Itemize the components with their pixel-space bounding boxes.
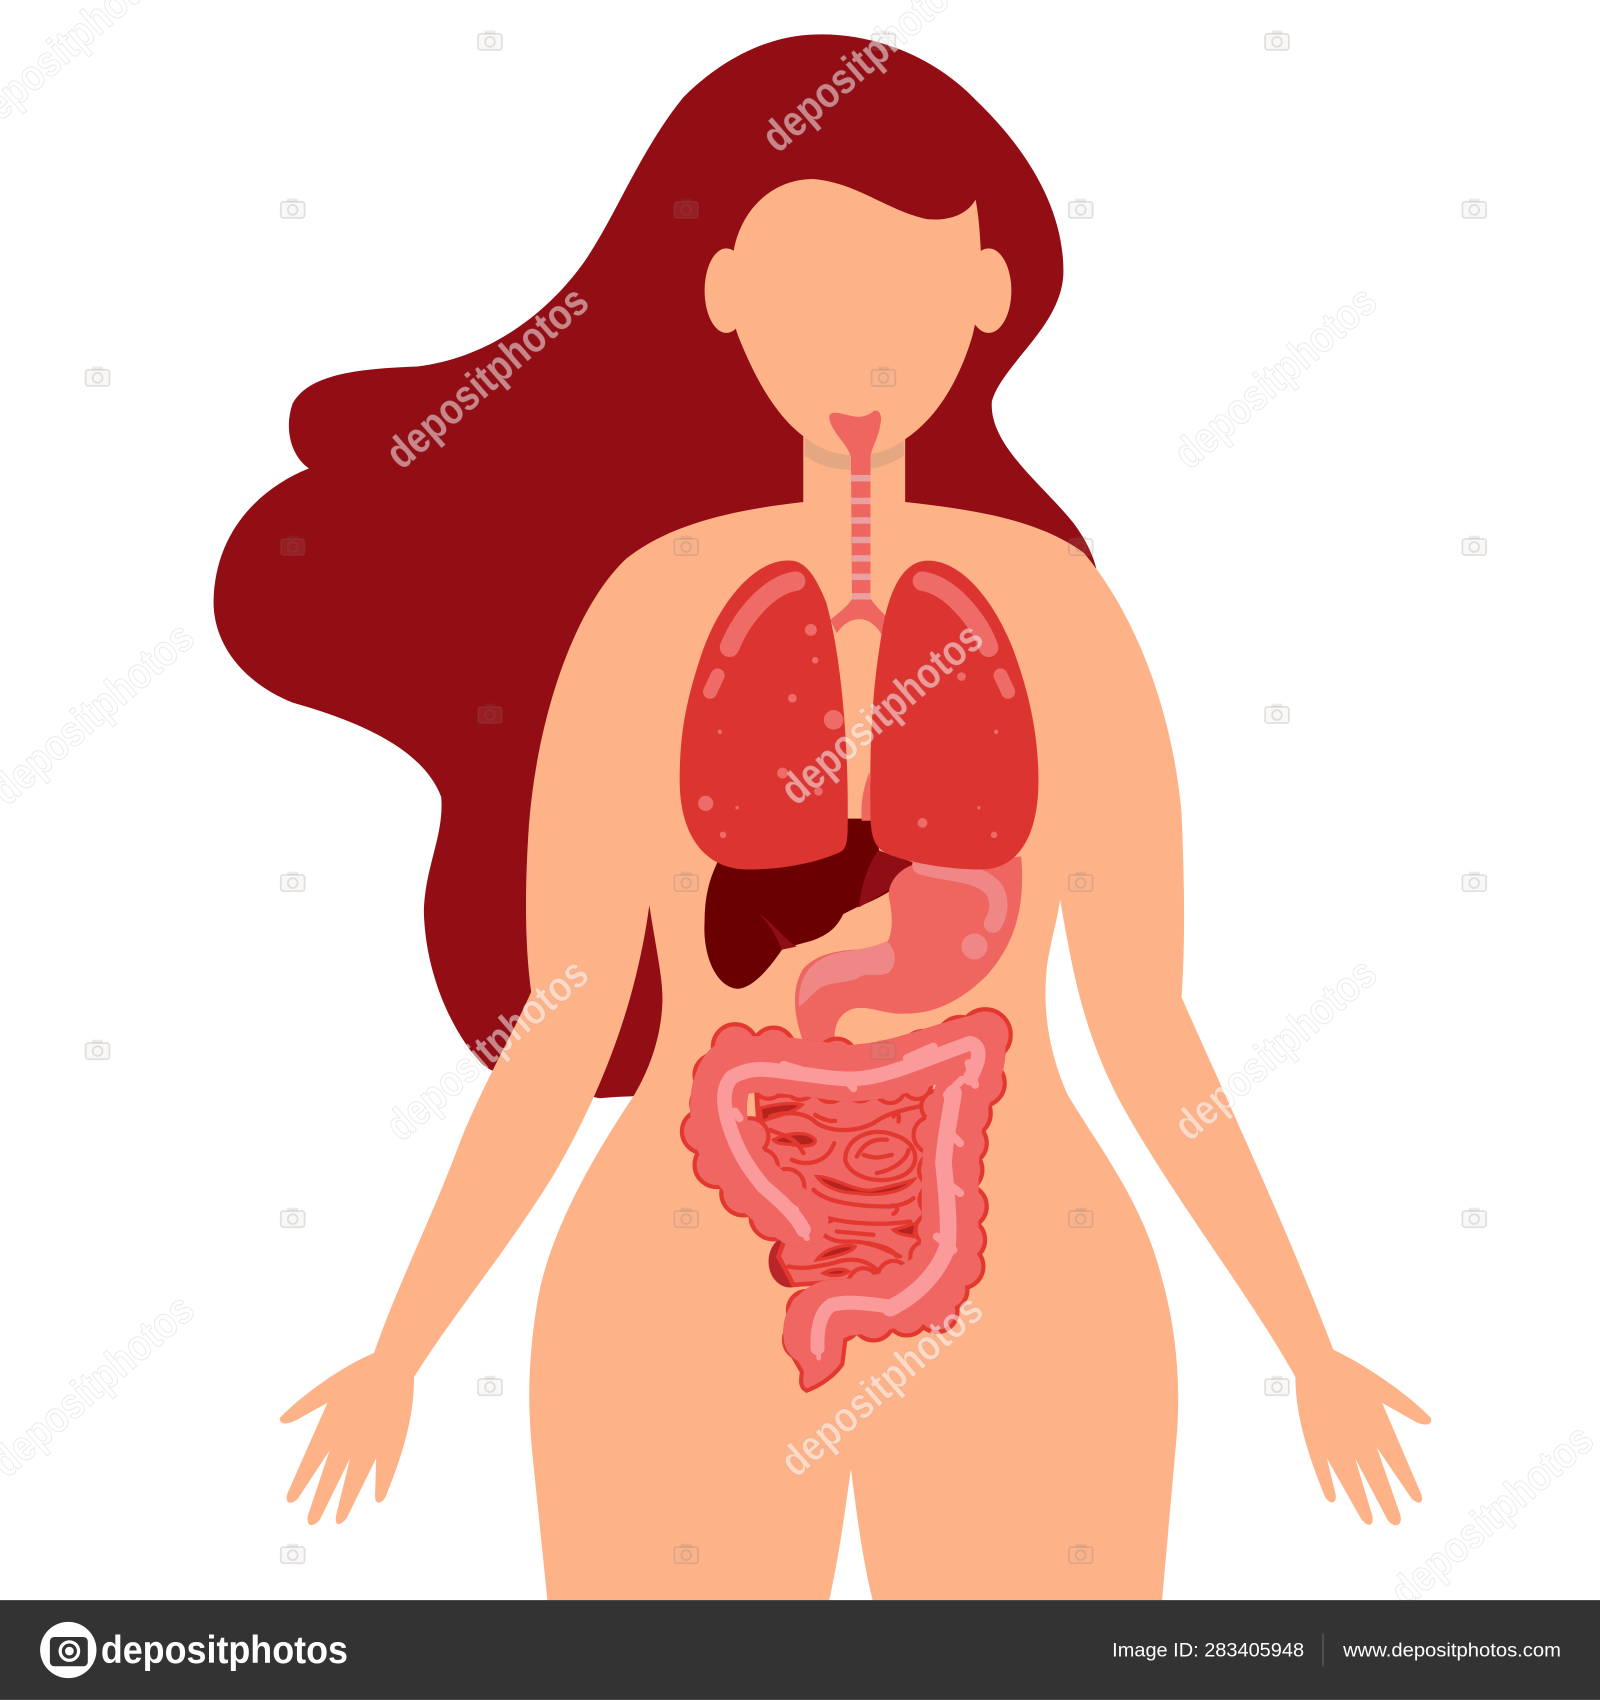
watermark text: depositphotos — [1165, 277, 1386, 478]
left lung highlights — [698, 581, 843, 838]
watermark text: depositphotos — [377, 277, 598, 478]
ear left — [705, 248, 748, 333]
trachea — [829, 411, 889, 638]
stomach spot — [962, 933, 988, 959]
face — [730, 179, 981, 455]
watermark text: depositphotos — [771, 613, 993, 814]
large intestine — [684, 1012, 1008, 1388]
rectal shadow — [768, 1236, 812, 1288]
watermark camera icons — [86, 30, 1486, 1563]
small intestine shadows — [760, 1103, 917, 1275]
watermark text: depositphotos — [1165, 949, 1386, 1150]
esophagus — [861, 772, 874, 821]
small intestine folds — [770, 1107, 918, 1270]
hair — [214, 34, 1097, 1098]
liver fold — [758, 913, 797, 950]
colon highlight — [724, 1043, 978, 1358]
stomach highlight — [921, 865, 998, 924]
image id: Image ID: 283405948 — [1112, 1640, 1304, 1662]
stomach — [795, 857, 1022, 1045]
right lung — [870, 561, 1038, 870]
liver — [704, 819, 917, 989]
intestines — [684, 1012, 1008, 1388]
divider — [1322, 1634, 1324, 1666]
website: www.depositphotos.com — [1342, 1640, 1561, 1662]
ear right — [966, 248, 1011, 333]
neck shadow — [804, 430, 904, 470]
footer bar — [0, 1600, 1600, 1700]
liver lobe — [859, 850, 917, 907]
logo icon — [40, 1622, 96, 1678]
body silhouette — [280, 434, 1431, 1600]
trachea rings — [851, 475, 870, 600]
right lung highlights — [918, 581, 1008, 838]
left lung — [680, 560, 848, 870]
logo wordmark: depositphotos — [101, 1629, 348, 1672]
duodenum highlight — [799, 941, 895, 1006]
watermark text: depositphotos — [377, 949, 598, 1150]
small intestine — [757, 1090, 927, 1285]
watermark text: depositphotos — [771, 1285, 993, 1486]
